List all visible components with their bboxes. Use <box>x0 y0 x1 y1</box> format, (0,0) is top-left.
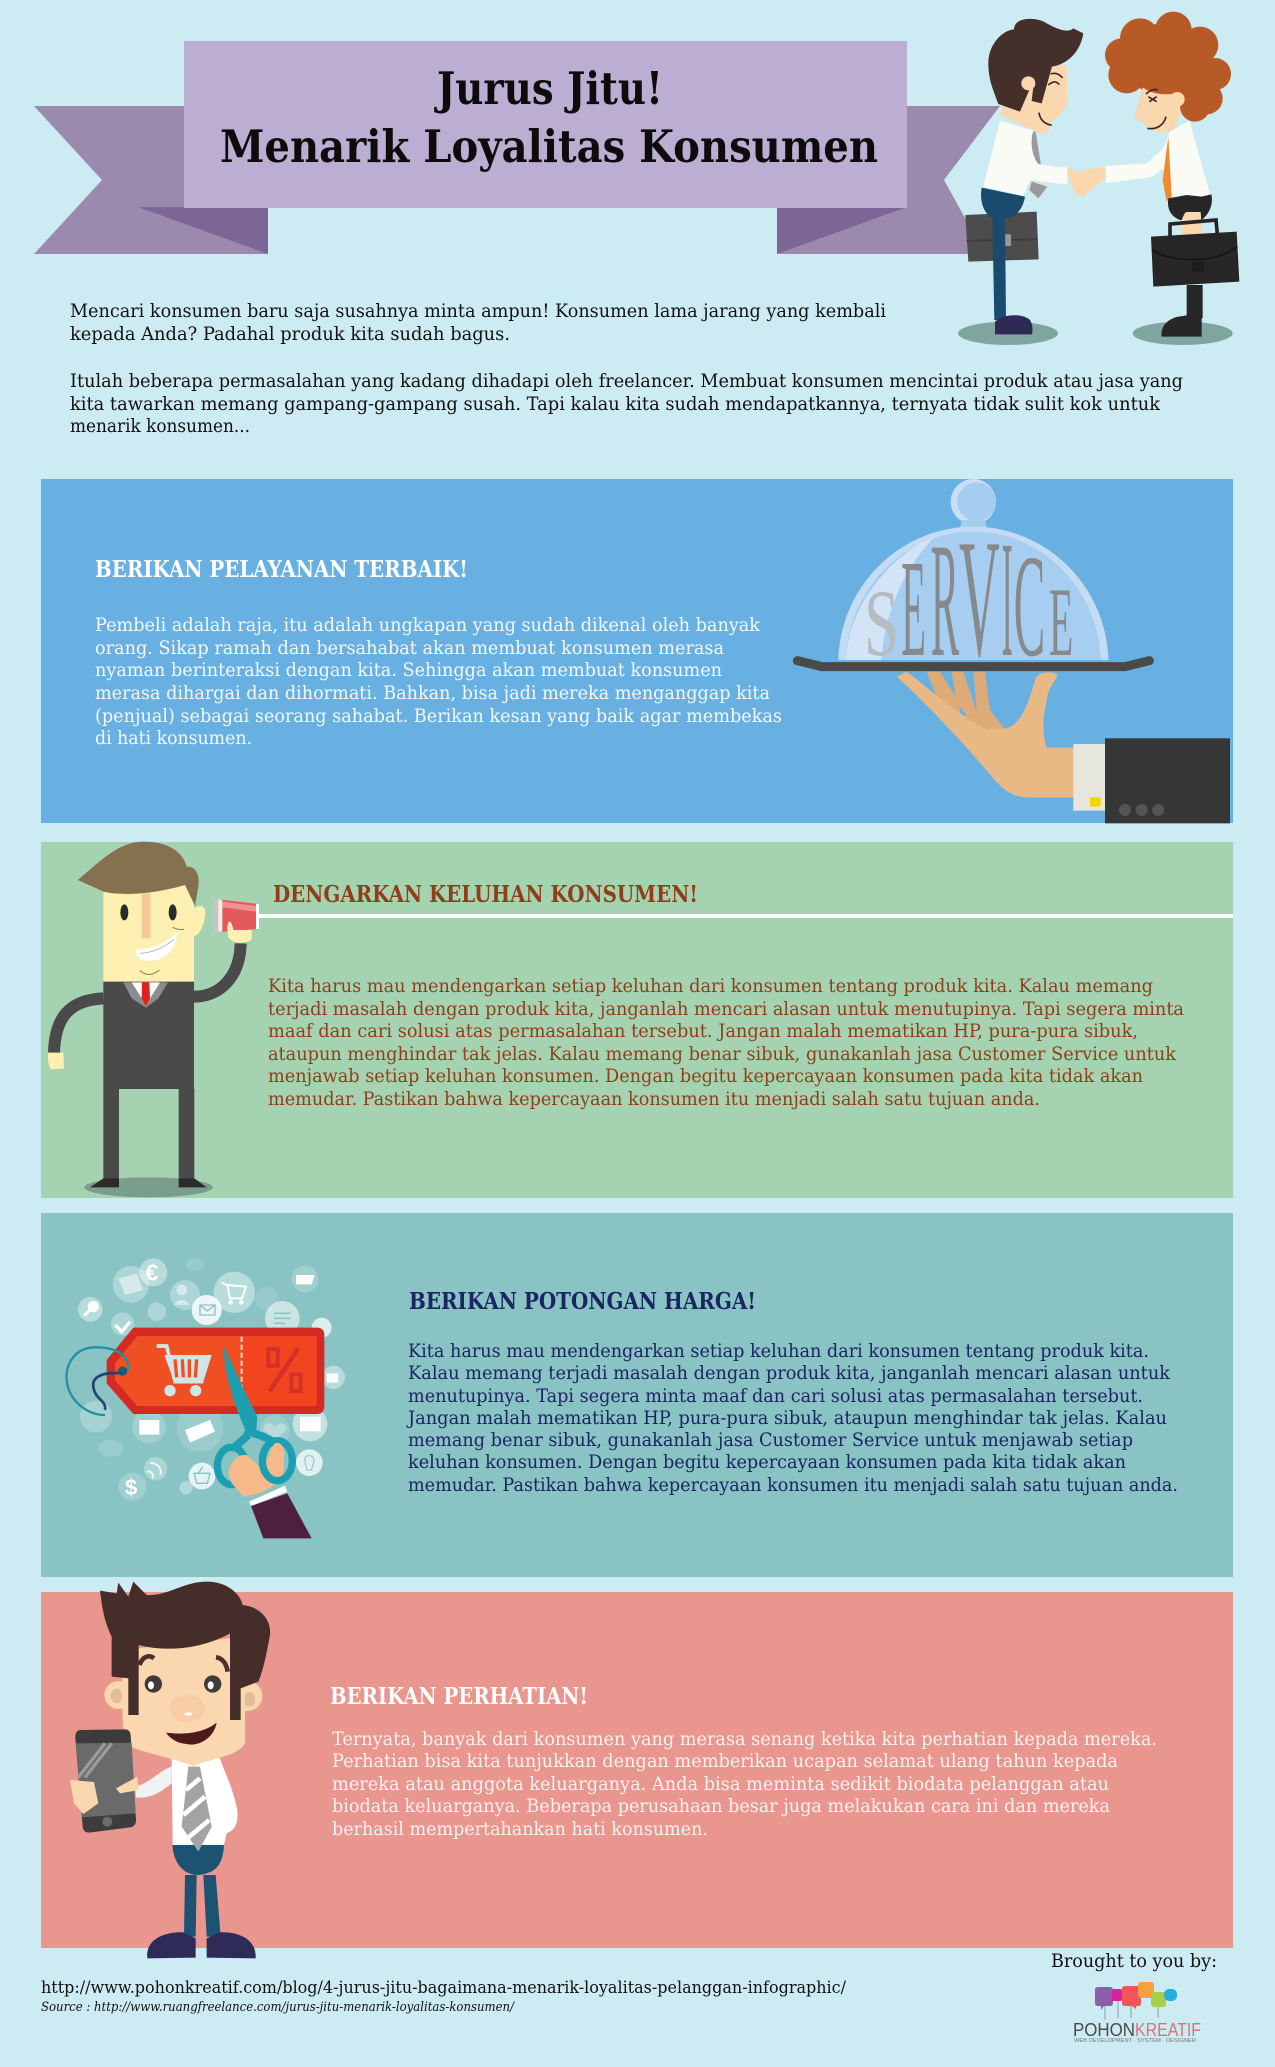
body text: pelayanan: di hati konsumen. <box>95 727 252 749</box>
body text: pelayanan: merasa dihargai dan dihormati. Bahkan, bisa jadi mereka menganggap kita <box>95 682 770 704</box>
footer: source links <box>41 1978 846 2015</box>
body text: keluhan: menjawab setiap keluhan konsumen. Dengan begitu kepercayaan konsumen pada kita tidak akan <box>268 1065 1143 1087</box>
service lettering: C <box>1014 524 1045 687</box>
illustration: price tag cut by scissors with floating icons: $ <box>125 1475 137 1500</box>
body text: pelayanan: orang. Sikap ramah dan bersahabat akan membuat konsumen merasa <box>95 637 724 659</box>
body text: pelayanan: nyaman berinteraksi dengan kita. Sehingga akan membuat konsumen <box>95 659 722 681</box>
logo: pohon kreatif: WEB DEVELOPMENT · SYSTEM · DESIGNER <box>1074 2038 1196 2044</box>
panel: dengarkan keluhan konsumen <box>41 842 1233 1198</box>
title banner <box>34 41 1000 254</box>
body text: perhatian: Ternyata, banyak dari konsumen yang merasa senang ketika kita perhatian kepada mereka. <box>332 1728 1157 1750</box>
heading: keluhan: DENGARKAN KELUHAN KONSUMEN! <box>273 881 698 908</box>
body text: pelayanan: Pembeli adalah raja, itu adalah ungkapan yang sudah dikenal oleh banyak <box>95 614 760 636</box>
body text: perhatian: mereka atau anggota keluarganya. Anda bisa meminta sedikit biodata pelanggan atau <box>332 1773 1109 1795</box>
panel: berikan perhatian <box>41 1582 1233 1958</box>
body text: keluhan <box>268 975 1184 1110</box>
body text: pelayanan <box>95 614 782 749</box>
body text: keluhan: ataupun menghindar tak jelas. Kalau memang benar sibuk, gunakanlah jasa Customer Service untuk <box>268 1043 1176 1065</box>
heading: potongan harga: BERIKAN POTONGAN HARGA! <box>409 1288 756 1315</box>
footer: brought to you by: Brought to you by: <box>1051 1950 1217 1972</box>
body text: potongan harga: memudar. Pastikan bahwa kepercayaan konsumen itu menjadi salah satu tujuan anda. <box>408 1474 1178 1496</box>
footer: source links: Source : http://www.ruangfreelance.com/jurus-jitu-menarik-loyalitas-konsumen/ <box>41 2000 515 2015</box>
service lettering: E <box>901 533 926 686</box>
illustration: service cloche on tray held by hand <box>797 479 1230 823</box>
service lettering: E <box>1049 568 1073 677</box>
service lettering <box>864 506 1073 693</box>
body text: perhatian: biodata keluarganya. Beberapa perusahaan besar juga melakukan cara ini dan mereka <box>332 1795 1110 1817</box>
logo: pohon kreatif: KREATIF <box>1135 2020 1201 2040</box>
intro text <box>70 300 1183 437</box>
panel: berikan pelayanan terbaik <box>41 479 1233 823</box>
body text: potongan harga: Kalau memang terjadi masalah dengan produk kita, janganlah mencari alasan untuk <box>408 1362 1170 1384</box>
title text: Menarik Loyalitas Konsumen <box>220 120 878 173</box>
title text: Jurus Jitu! <box>434 62 663 115</box>
intro text: menarik konsumen... <box>70 415 250 437</box>
body text: pelayanan: (penjual) sebagai seorang sahabat. Berikan kesan yang baik agar membekas <box>95 705 782 727</box>
body text: keluhan: maaf dan cari solusi atas permasalahan tersebut. Jangan malah mematikan HP, pura-pura sibuk, <box>268 1020 1138 1042</box>
title text <box>220 62 878 173</box>
service lettering: I <box>1002 507 1013 691</box>
logo: pohon kreatif: POHON <box>1073 2020 1135 2040</box>
heading: pelayanan: BERIKAN PELAYANAN TERBAIK! <box>95 556 468 583</box>
body text: perhatian: Perhatian bisa kita tunjukkan dengan memberikan ucapan selamat ulang tahun kepada <box>332 1750 1118 1772</box>
service lettering: R <box>931 509 959 691</box>
body text: potongan harga: keluhan konsumen. Dengan begitu kepercayaan konsumen pada kita tidak akan <box>408 1451 1126 1473</box>
body text: keluhan: Kita harus mau mendengarkan setiap keluhan dari konsumen tentang produk kita. Kalau memang <box>268 975 1153 997</box>
logo: pohon kreatif <box>1073 1982 1201 2044</box>
body text: keluhan: memudar. Pastikan bahwa kepercayaan konsumen itu menjadi salah satu tujuan anda. <box>268 1088 1040 1110</box>
intro text: Mencari konsumen baru saja susahnya minta ampun! Konsumen lama jarang yang kembali <box>70 300 886 322</box>
illustration: price tag cut by scissors with floating icons: € <box>145 1260 158 1286</box>
panel: berikan potongan harga <box>41 1213 1233 1577</box>
heading: perhatian: BERIKAN PERHATIAN! <box>330 1683 588 1710</box>
body text: keluhan: terjadi masalah dengan produk kita, janganlah mencari alasan untuk menutupinya. Tapi segera minta <box>268 998 1184 1020</box>
intro text: Itulah beberapa permasalahan yang kadang dihadapi oleh freelancer. Membuat konsumen mencintai produk atau jasa yang <box>70 370 1183 392</box>
illustration: price tag cut by scissors with floating icons <box>66 1258 345 1538</box>
illustration: two men shaking hands <box>958 12 1239 345</box>
body text: potongan harga <box>406 1340 1178 1496</box>
body text: potongan harga: memang benar sibuk, gunakanlah jasa Customer Service untuk menjawab setiap <box>408 1429 1133 1451</box>
body text: potongan harga: Jangan malah mematikan HP, pura-pura sibuk, ataupun menghindar tak jelas. Kalau <box>406 1407 1167 1429</box>
body text: perhatian <box>332 1728 1157 1840</box>
intro text: kita tawarkan memang gampang-gampang susah. Tapi kalau kita sudah mendapatkannya, ternyata tidak sulit kok untuk <box>70 393 1160 415</box>
body text: potongan harga: menutupinya. Tapi segera minta maaf dan cari solusi atas permasalahan tersebut. <box>408 1385 1143 1407</box>
footer: source links: http://www.pohonkreatif.com/blog/4-jurus-jitu-bagaimana-menarik-loyalitas-pelanggan-infographic/ <box>41 1978 846 1998</box>
illustration: man listening with tin-can phone <box>48 842 259 1197</box>
body text: potongan harga: Kita harus mau mendengarkan setiap keluhan dari konsumen tentang produk kita. <box>408 1340 1149 1362</box>
service lettering: V <box>959 506 1000 693</box>
service lettering: S <box>864 570 899 676</box>
intro text: kepada Anda? Padahal produk kita sudah bagus. <box>70 323 510 345</box>
illustration: smiling man holding smartphone <box>70 1582 270 1958</box>
body text: perhatian: berhasil mempertahankan hati konsumen. <box>332 1818 708 1840</box>
